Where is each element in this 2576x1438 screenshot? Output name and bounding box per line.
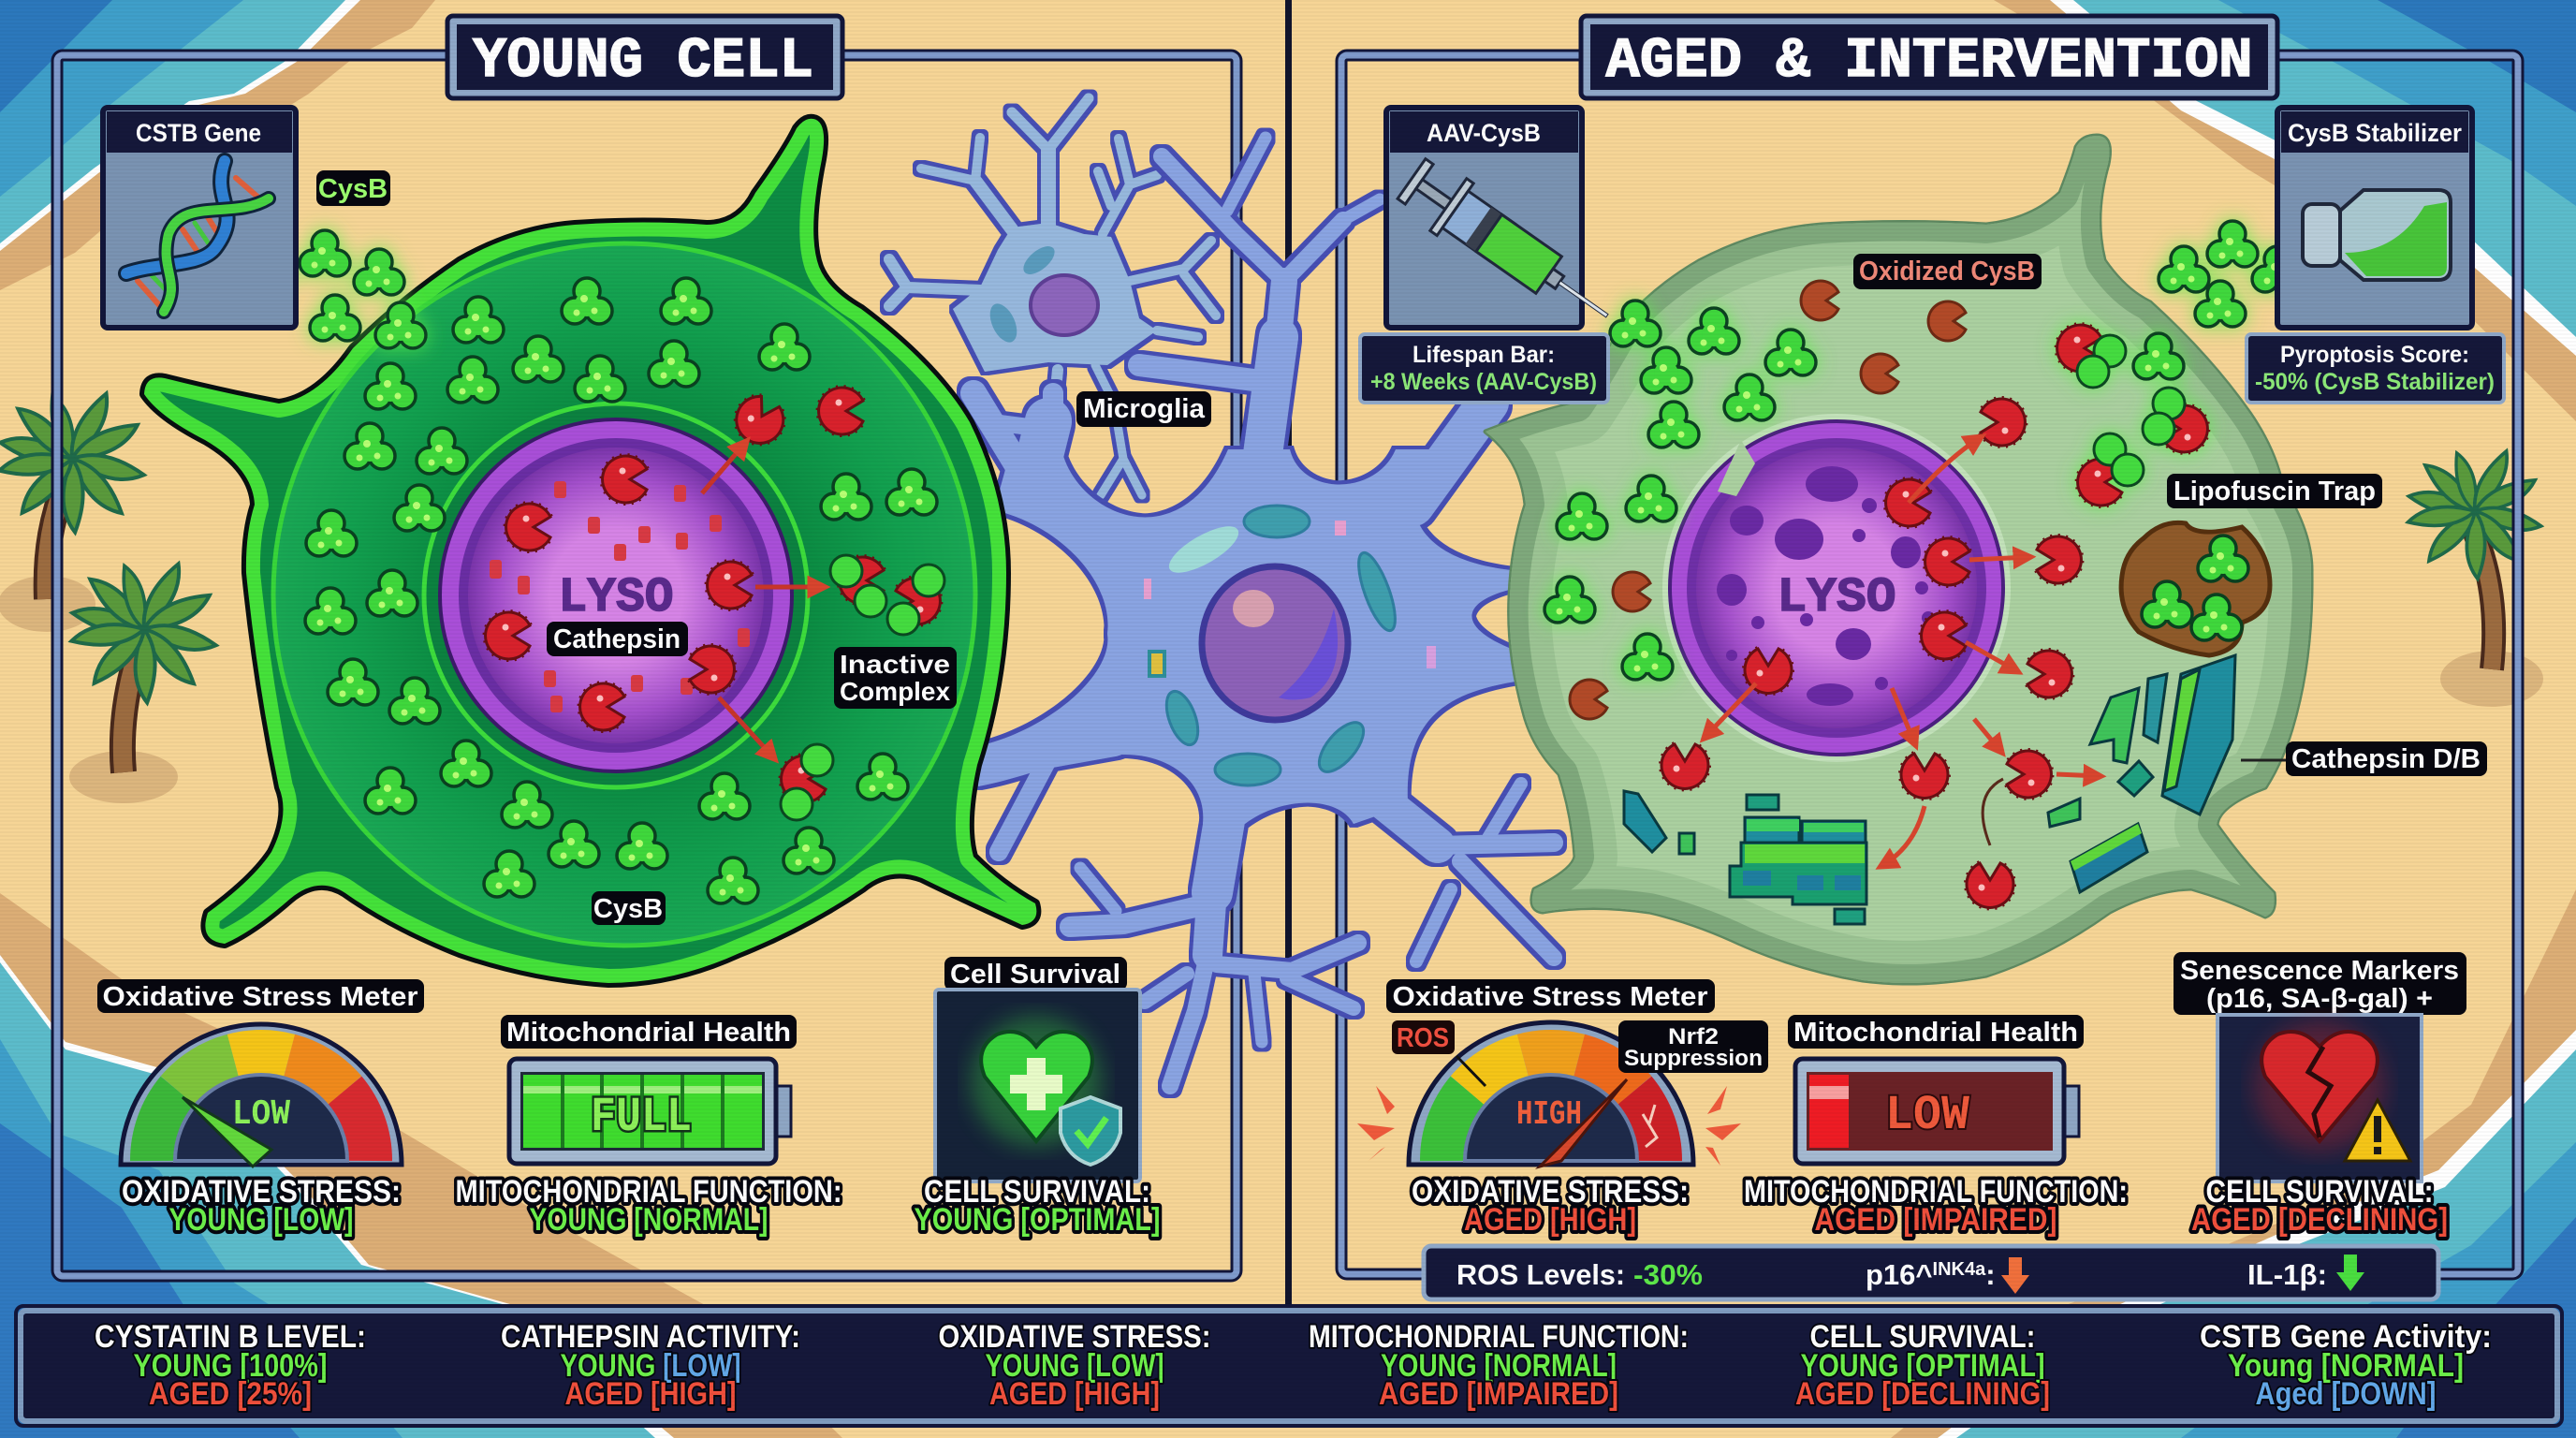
lyso text: LYSO <box>558 570 674 625</box>
summary: cathepsin activity: CATHEPSIN ACTIVITY: <box>501 1319 800 1355</box>
readout: oxidative stress <box>122 1174 401 1238</box>
gauge: aged oxidative stress <box>1409 1022 1693 1167</box>
readout: mitochondrial function: YOUNG [NORMAL] <box>530 1202 768 1238</box>
label: nrf2 suppression: Suppression <box>1624 1046 1763 1071</box>
summary: oxidative stress <box>938 1319 1211 1412</box>
gauge: young oxidative stress <box>121 1024 402 1167</box>
panel: aged survival heart <box>2217 1015 2422 1181</box>
icon: alarm sparks <box>1357 1086 1741 1166</box>
cathepsin enzymes <box>486 388 863 730</box>
summary: cell survival: AGED [DECLINING] <box>1795 1376 2050 1412</box>
callout: lifespan bar: Lifespan Bar: <box>1412 342 1555 368</box>
battery: low: LOW <box>1885 1088 1970 1143</box>
summary: oxidative stress: OXIDATIVE STRESS: <box>938 1319 1211 1355</box>
label: senescence markers: Senescence Markers <box>2180 956 2459 986</box>
label: senescence markers: (p16, SA-β-gal) + <box>2206 984 2433 1014</box>
label: inactive complex <box>834 647 957 709</box>
label: young mito health: Mitochondrial Health <box>506 1018 791 1048</box>
inactive complexes <box>781 555 944 820</box>
label: young stress meter: Oxidative Stress Meter <box>103 982 417 1012</box>
label: cathepsin d/b: Cathepsin D/B <box>2291 744 2481 774</box>
summary: cell survival <box>1795 1319 2050 1412</box>
summary: cystatin b level: YOUNG [100%] <box>133 1348 328 1384</box>
fragmented mitochondria <box>1624 655 2235 924</box>
summary: cstb gene activity <box>2200 1319 2492 1412</box>
summary: cathepsin activity: YOUNG [LOW] <box>560 1348 741 1384</box>
icon: green heart <box>981 1032 1092 1141</box>
palm tree left upper <box>0 390 145 599</box>
oxidized cysb <box>1570 281 1966 719</box>
metric: p16 ink4a: INK4a <box>1933 1259 1986 1280</box>
label: nrf2 suppression <box>1618 1020 1768 1073</box>
metric: ros levels <box>1456 1258 1703 1291</box>
metric: ros levels: -30% <box>1633 1258 1703 1291</box>
icon: vial <box>2303 190 2451 280</box>
panel frame: aged and intervention <box>1341 55 2518 1274</box>
label: ros <box>1392 1020 1486 1086</box>
readout: oxidative stress: OXIDATIVE STRESS: <box>1412 1174 1689 1210</box>
readout: mitochondrial function: MITOCHONDRIAL FUNCTION: <box>455 1174 842 1210</box>
aged readouts <box>1412 1174 2448 1238</box>
lipofuscin trap <box>2121 522 2270 655</box>
readout: mitochondrial function <box>455 1174 842 1238</box>
icon: broken heart <box>2261 1032 2378 1141</box>
label: cathepsin d/b <box>2241 741 2487 776</box>
battery: full <box>509 1059 791 1164</box>
metric: ros levels: ROS Levels: <box>1456 1258 1625 1291</box>
aged lyso text: LYSO <box>1777 570 1896 625</box>
callout: lifespan bar: +8 Weeks (AAV-CysB) <box>1370 369 1597 395</box>
readout: cell survival: AGED [DECLINING] <box>2191 1202 2448 1238</box>
summary: mitochondrial function: YOUNG [NORMAL] <box>1381 1348 1617 1384</box>
summary: cystatin b level: CYSTATIN B LEVEL: <box>95 1319 366 1355</box>
cell membrane <box>144 119 1036 983</box>
young cell <box>144 119 1036 983</box>
title: aged and intervention: AGED & INTERVENTION <box>1606 30 2252 94</box>
center divider <box>1285 0 1292 1311</box>
callout: pyroptosis score: -50% (CysB Stabilizer) <box>2255 369 2495 395</box>
summary: cathepsin activity <box>501 1319 800 1412</box>
readout: cell survival <box>2191 1174 2448 1238</box>
icon: warning triangle <box>2345 1100 2410 1161</box>
readout: mitochondrial function: MITOCHONDRIAL FUNCTION: <box>1744 1174 2128 1210</box>
label: aged mito health: Mitochondrial Health <box>1793 1018 2078 1048</box>
neuron cell center <box>973 138 1554 1086</box>
readout: oxidative stress: OXIDATIVE STRESS: <box>122 1174 401 1210</box>
callout: pyroptosis score: Pyroptosis Score: <box>2280 342 2469 368</box>
metric: p16 ink4a <box>1866 1257 2029 1294</box>
readout: mitochondrial function: AGED [IMPAIRED] <box>1814 1202 2057 1238</box>
label: senescence markers <box>2174 952 2466 1015</box>
gauge: young oxidative stress: LOW <box>232 1094 290 1135</box>
metric: il-1 beta: IL-1β: <box>2247 1258 2327 1291</box>
summary: oxidative stress: YOUNG [LOW] <box>985 1348 1164 1384</box>
cysb clusters <box>265 230 426 348</box>
label: young cell survival: Cell Survival <box>950 960 1120 990</box>
panel: cstb gene: CSTB Gene <box>136 119 261 147</box>
panel: summary bar <box>16 1306 2562 1426</box>
summary: mitochondrial function <box>1309 1319 1689 1412</box>
summary: cstb gene activity: CSTB Gene Activity: <box>2200 1319 2492 1355</box>
callout: pyroptosis score <box>2247 334 2504 403</box>
panel frame: aged highlight <box>1341 55 2518 1274</box>
icon: shield check <box>1061 1097 1120 1165</box>
arrows: cathepsin escape <box>702 442 824 758</box>
panel: cysb stabilizer: CysB Stabilizer <box>2288 119 2462 147</box>
panel: cysb stabilizer <box>2277 108 2472 328</box>
readout: oxidative stress: YOUNG [LOW] <box>168 1202 354 1238</box>
readout: oxidative stress: AGED [HIGH] <box>1464 1202 1636 1238</box>
battery: full: FULL <box>591 1090 692 1145</box>
label: oxidized cysb: Oxidized CysB <box>1859 257 2035 286</box>
summary: cathepsin activity: AGED [HIGH] <box>565 1376 736 1412</box>
summary: cstb gene activity: Aged [DOWN] <box>2256 1376 2436 1412</box>
aged membrane band <box>1486 136 2311 983</box>
label: cathepsin: Cathepsin <box>553 624 681 654</box>
cytoplasm <box>273 243 975 946</box>
cysb clusters inside cell <box>305 278 937 903</box>
label: inactive complex: Complex <box>840 677 950 706</box>
panel frame: young cell highlight <box>57 55 1237 1276</box>
metric: il-1 beta <box>2247 1255 2364 1291</box>
label: cysb: CysB <box>593 894 663 924</box>
metric: p16 ink4a: p16^ <box>1866 1258 1933 1291</box>
summary: cystatin b level <box>95 1319 366 1412</box>
young readouts <box>122 1174 1161 1238</box>
summary: mitochondrial function: AGED [IMPAIRED] <box>1379 1376 1618 1412</box>
lysosome halo <box>424 404 808 787</box>
panel: aav-cysb <box>1386 108 1625 342</box>
icon: syringe <box>1393 153 1625 342</box>
label: aged stress meter: Oxidative Stress Meter <box>1393 982 1707 1012</box>
aged membrane rim <box>1486 136 2311 983</box>
summary: cell survival: YOUNG [OPTIMAL] <box>1801 1348 2044 1384</box>
cathepsin released <box>1661 399 2081 907</box>
lysosome <box>440 419 792 771</box>
metric: p16 ink4a: : <box>1985 1258 1996 1291</box>
callout: lifespan bar <box>1360 334 1608 403</box>
summary: oxidative stress: AGED [HIGH] <box>989 1376 1160 1412</box>
palm tree left lower <box>71 561 217 772</box>
palm tree right <box>2408 448 2542 669</box>
panel: cstb gene <box>103 108 296 328</box>
label: ros: ROS <box>1397 1023 1449 1053</box>
aged cell <box>1486 136 2487 983</box>
microglia cell upper <box>889 98 1216 495</box>
readout: mitochondrial function <box>1744 1174 2128 1238</box>
cell bright rim <box>144 119 1036 983</box>
panel: intervention metrics <box>1424 1246 2438 1299</box>
readout: cell survival <box>914 1174 1161 1238</box>
label: nrf2 suppression: Nrf2 <box>1668 1024 1719 1049</box>
label: lipofuscin trap: Lipofuscin Trap <box>2174 477 2376 506</box>
label: microglia: Microglia <box>1083 394 1206 424</box>
title: young cell: YOUNG CELL <box>473 30 813 94</box>
label: cysb source: CysB <box>318 174 388 204</box>
summary: cell survival: CELL SURVIVAL: <box>1810 1319 2035 1355</box>
readout: cell survival: CELL SURVIVAL: <box>924 1174 1150 1210</box>
panel: young survival heart <box>935 990 1140 1181</box>
battery: low <box>1795 1059 2079 1164</box>
aged cysb clusters <box>1544 221 2303 680</box>
readout: cell survival: YOUNG [OPTIMAL] <box>914 1202 1161 1238</box>
summary: cystatin b level: AGED [25%] <box>149 1376 312 1412</box>
title: young cell <box>447 16 842 98</box>
summary: mitochondrial function: MITOCHONDRIAL FUNCTION: <box>1309 1319 1689 1355</box>
aged membrane <box>1486 136 2311 983</box>
label: inactive complex: Inactive <box>840 650 950 679</box>
aged lysosome <box>1662 414 2011 762</box>
gauge: aged oxidative stress: HIGH <box>1516 1095 1582 1134</box>
readout: oxidative stress <box>1412 1174 1689 1238</box>
readout: cell survival: CELL SURVIVAL: <box>2205 1174 2434 1210</box>
summary: cstb gene activity: Young [NORMAL] <box>2228 1348 2464 1384</box>
panel: aav-cysb: AAV-CysB <box>1427 119 1541 147</box>
panel frame: young cell <box>57 55 1237 1276</box>
icon: dna helix <box>126 161 269 312</box>
arrows: aged cathepsin leakage <box>1705 437 2100 866</box>
